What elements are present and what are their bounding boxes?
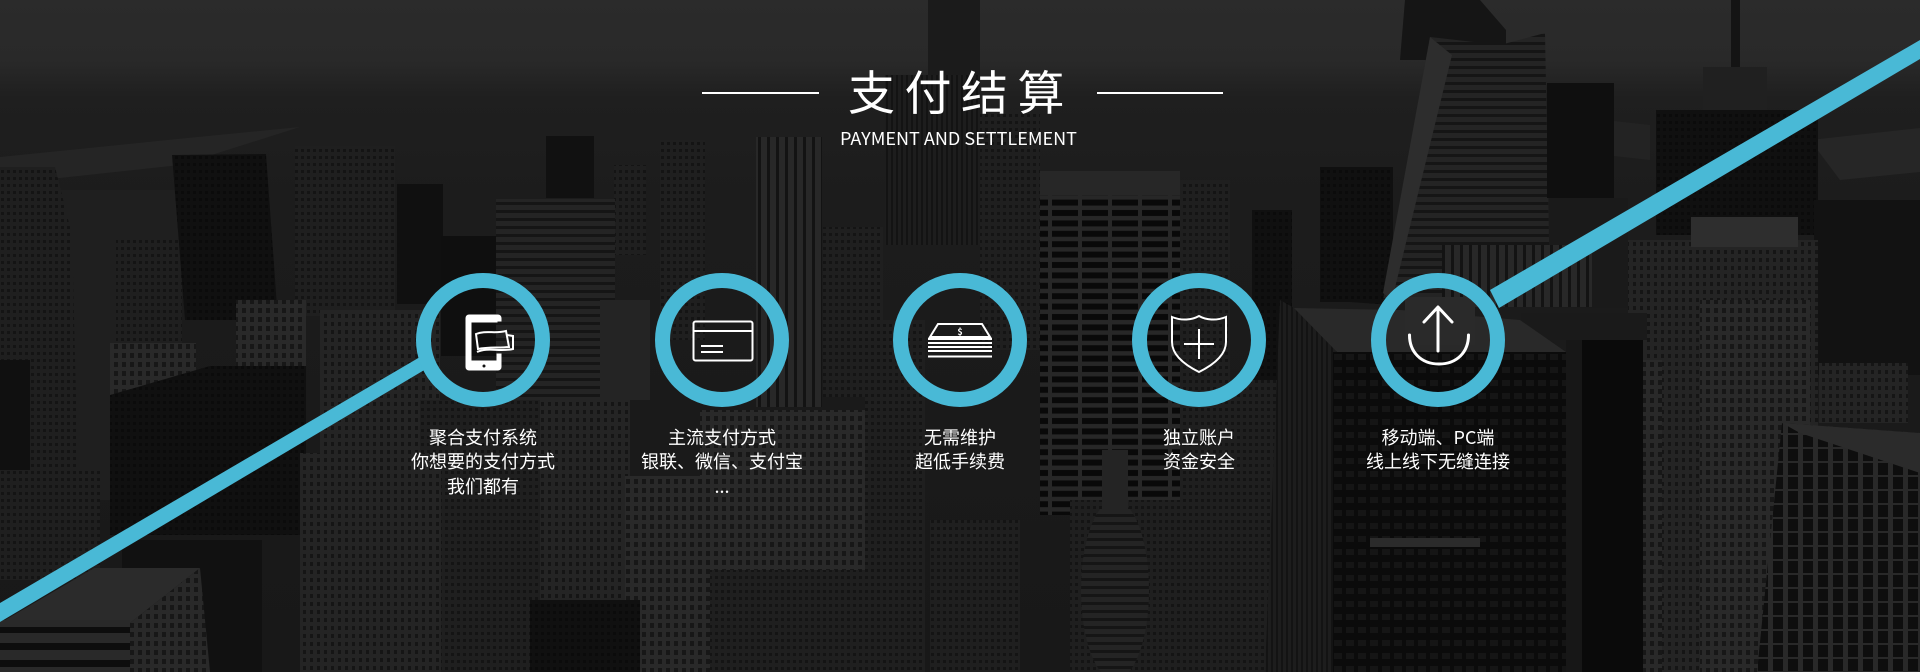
left background towers — [60, 190, 180, 500]
label 2: 主流支付方式 — [668, 424, 776, 450]
left mid-rise blocks — [110, 343, 196, 403]
label 2: ... — [714, 473, 730, 499]
dark block right of glass tower — [1547, 83, 1614, 198]
icon: phone with cards — [466, 315, 513, 370]
far right dark tower — [1814, 200, 1920, 375]
label 2: 银联、微信、支付宝 — [641, 448, 803, 474]
water far right — [1810, 128, 1920, 180]
item: no maintenance — [900, 280, 1020, 474]
ring 2 — [662, 280, 782, 400]
label 4: 资金安全 — [1163, 448, 1235, 474]
item: aggregated payment — [411, 280, 555, 499]
glass skyscraper — [1400, 0, 1506, 60]
title rule left — [702, 92, 819, 94]
title rule right — [1097, 92, 1223, 94]
icon: upload arrow — [1410, 307, 1468, 364]
label 3: 无需维护 — [924, 424, 996, 450]
river far left — [0, 127, 300, 182]
label 5: 线上线下无缝连接 — [1366, 448, 1510, 474]
diagonal teal line left — [0, 357, 426, 622]
central black banded tower — [1040, 171, 1180, 197]
ring 3 — [900, 280, 1020, 400]
ring 1 — [424, 280, 542, 400]
sloped-roof black tower — [1566, 340, 1643, 672]
icon: stack of money — [928, 324, 992, 356]
subtitle: PAYMENT AND SETTLEMENT — [840, 125, 1077, 151]
item: independent account — [1140, 280, 1258, 474]
icon: shield with plus — [1172, 316, 1226, 372]
right gray towers — [1628, 240, 1818, 672]
label 5: 移动端、PC端 — [1382, 424, 1494, 450]
antenna tower — [1656, 0, 1818, 235]
ring 5 — [1378, 280, 1498, 400]
item: online and offline — [1366, 280, 1510, 474]
bottom-left building — [0, 568, 200, 623]
label 4: 独立账户 — [1163, 424, 1235, 450]
diagonal teal line right — [1490, 40, 1920, 308]
item: mainstream payment — [641, 280, 803, 499]
label 1: 你想要的支付方式 — [411, 448, 555, 474]
label 1: 聚合支付系统 — [429, 424, 537, 450]
label 1: 我们都有 — [447, 473, 519, 499]
icon: stack of money: $ — [957, 325, 963, 338]
ring 4 — [1140, 280, 1258, 400]
label 3: 超低手续费 — [915, 448, 1005, 474]
icon: bank card — [693, 322, 753, 360]
title: 支付结算 — [848, 55, 1074, 124]
